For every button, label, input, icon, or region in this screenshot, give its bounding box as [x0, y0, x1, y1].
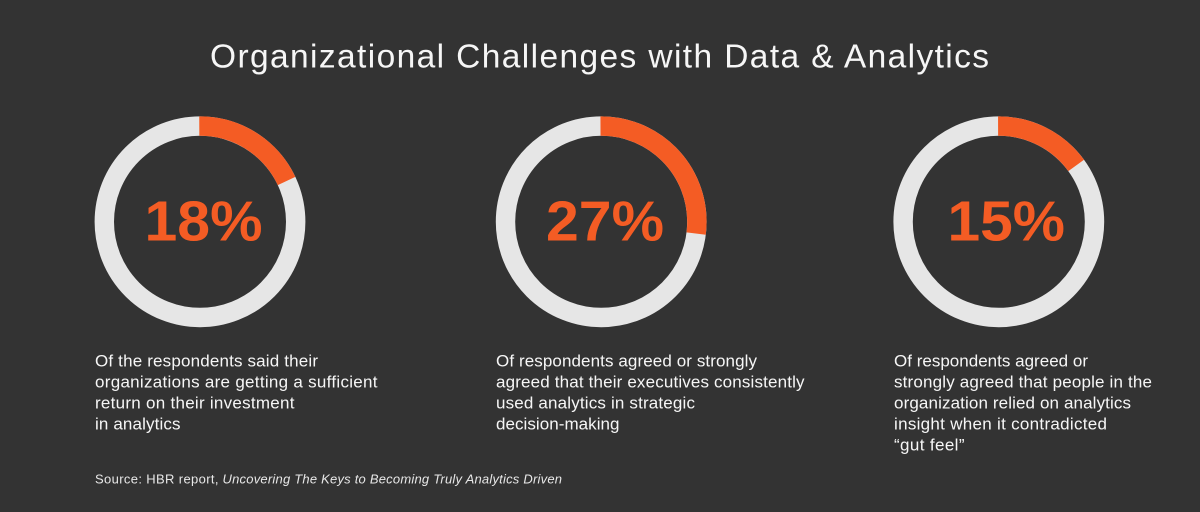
- description: 15%: Of respondents agreed or: [894, 352, 1088, 370]
- description: 27%: [496, 352, 805, 434]
- value: 18%: 18%: [144, 190, 262, 254]
- source note: Source: HBR report,: [95, 472, 218, 486]
- description: 15%: organization relied on analytics: [894, 394, 1131, 412]
- description: 27%: Of respondents agreed or strongly: [496, 352, 758, 370]
- title: Organizational Challenges with Data & Analytics: [210, 38, 989, 76]
- source note: Uncovering The Keys to Becoming Truly Analytics Driven: [222, 472, 562, 486]
- donut: 18%: [104, 126, 296, 318]
- panel: 15%: [894, 126, 1152, 455]
- value: 27%: 27%: [546, 190, 664, 254]
- description: 18%: return on their investment: [95, 394, 295, 412]
- panel: 27%: [496, 126, 805, 434]
- description: 15%: “gut feel”: [894, 436, 965, 454]
- description: 18%: organizations are getting a sufficient: [95, 372, 378, 392]
- donut: 15%: [903, 126, 1094, 318]
- description: 18%: Of the respondents said their: [95, 352, 318, 370]
- donut: 27%: [506, 126, 697, 318]
- description: 18%: [95, 352, 378, 434]
- description: 27%: used analytics in strategic: [496, 394, 696, 412]
- description: 15%: [894, 352, 1152, 454]
- value: 15%: 15%: [948, 190, 1065, 254]
- description: 27%: decision-making: [496, 414, 620, 434]
- description: 15%: insight when it contradicted: [894, 414, 1107, 434]
- description: 27%: agreed that their executives consistently: [496, 372, 805, 392]
- panel: 18%: [95, 126, 378, 434]
- description: 15%: strongly agreed that people in the: [894, 372, 1152, 392]
- description: 18%: in analytics: [95, 414, 180, 434]
